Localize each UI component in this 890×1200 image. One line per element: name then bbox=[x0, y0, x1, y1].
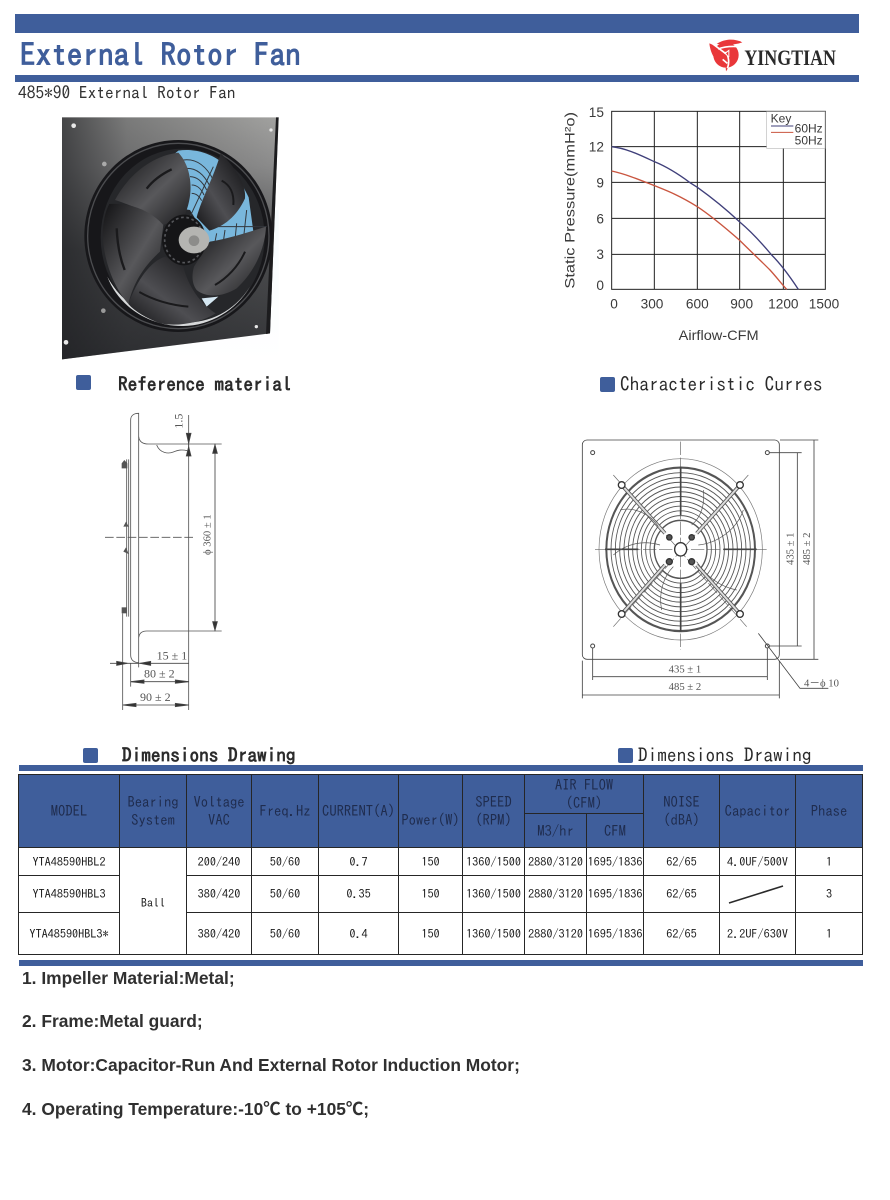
fan-curve chart bbox=[562, 105, 840, 343]
wire guard rings bbox=[606, 468, 755, 631]
front-view dimension drawing: 4－ϕ 10 bbox=[804, 679, 839, 690]
venturi ring bbox=[84, 140, 272, 332]
side-view dimension drawing: 90 ± 2 bbox=[140, 690, 171, 704]
guard struts bbox=[605, 467, 757, 632]
specification table: YTA48590HBL3 bbox=[32, 888, 106, 900]
specification table: VAC bbox=[208, 812, 230, 827]
specification table: 150 bbox=[421, 928, 440, 940]
specification table: 2.2UF/630V bbox=[727, 928, 788, 940]
specification table: MODEL bbox=[51, 803, 87, 818]
heading: dimensions drawing right: Dimensions Drawing bbox=[638, 746, 812, 765]
side-view dimension drawing bbox=[105, 412, 222, 710]
specification table: NOISE bbox=[663, 794, 700, 809]
specification table: Freq.Hz bbox=[259, 803, 311, 818]
specification table: 4.0UF/500V bbox=[727, 856, 788, 868]
specification table: (CFM) bbox=[566, 795, 602, 810]
legend key bbox=[767, 112, 825, 148]
specification table: CURRENT(A) bbox=[322, 803, 395, 818]
specification table: 380/420 bbox=[198, 928, 240, 940]
specification table: 3 bbox=[826, 888, 832, 900]
heading: reference material: Reference material bbox=[118, 375, 292, 394]
specification table: (RPM) bbox=[475, 812, 512, 827]
subtitle: 485*90 External Rotor Fan bbox=[18, 85, 235, 102]
side-view dimension drawing: 15 ± 1 bbox=[157, 648, 187, 662]
table bottom rule bbox=[19, 960, 863, 966]
specification table: Power(W) bbox=[401, 812, 460, 827]
x-axis ticks: 0 bbox=[610, 297, 618, 312]
specification table: 1695/1836 bbox=[588, 856, 642, 868]
heading: characteristic curves: Characteristic Curres bbox=[620, 375, 822, 394]
logo: Yingtian bbox=[709, 40, 836, 72]
motor bolts bbox=[122, 460, 129, 613]
specification table: Bearing bbox=[127, 794, 179, 809]
top banner bar bbox=[15, 14, 859, 33]
specification table: Phase bbox=[811, 803, 847, 818]
specification table: 150 bbox=[421, 888, 440, 900]
specification table: 0.4 bbox=[349, 928, 368, 940]
spec: impeller: 1. Impeller Material:Metal; bbox=[22, 968, 235, 988]
dimension labels: 435 ± 1 bbox=[669, 665, 701, 676]
corner mounting holes bbox=[591, 451, 769, 648]
hub and motor bolts bbox=[618, 482, 743, 617]
specification table: 2880/3120 bbox=[528, 928, 583, 940]
specification table: 62/65 bbox=[666, 888, 697, 900]
specification table: 2880/3120 bbox=[528, 856, 583, 868]
specification table: CFM bbox=[604, 822, 626, 838]
specification table bbox=[18, 774, 863, 955]
specification table: SPEED bbox=[475, 794, 512, 809]
specification table: 1 bbox=[826, 928, 832, 940]
front-view dimension drawing: 485 ± 2 bbox=[802, 532, 813, 565]
dimension lines bbox=[110, 433, 217, 707]
specification table: Voltage bbox=[193, 794, 245, 809]
specification table: Capacitor bbox=[725, 803, 790, 818]
50Hz curve bbox=[612, 171, 787, 289]
dimension lines bbox=[582, 440, 828, 698]
mounting holes bbox=[64, 123, 273, 345]
legend key: 60Hz bbox=[795, 121, 823, 135]
y-axis ticks bbox=[589, 105, 604, 293]
legend key: Key bbox=[771, 112, 791, 126]
specification table: 1360/1500 bbox=[466, 888, 521, 900]
specification table: 50/60 bbox=[270, 928, 300, 940]
front-view dimension drawing: 485 ± 2 bbox=[669, 682, 701, 693]
specification table: 50/60 bbox=[270, 856, 300, 868]
y-axis ticks: 0 bbox=[596, 278, 604, 293]
specification table: 1695/1836 bbox=[588, 928, 642, 940]
sky through guard bbox=[120, 150, 255, 243]
blade outlines bbox=[613, 490, 743, 610]
fan side profile bbox=[105, 413, 222, 710]
specification table: 380/420 bbox=[198, 888, 240, 900]
specification table: 1360/1500 bbox=[466, 928, 521, 940]
specification table: 62/65 bbox=[666, 856, 697, 868]
mounting plate bbox=[62, 117, 279, 359]
specifications list bbox=[22, 968, 520, 1119]
front-view dimension drawing: 435 ± 1 bbox=[786, 532, 797, 565]
mounting plate outline bbox=[582, 440, 779, 659]
bullet: characteristic curves bbox=[600, 377, 615, 392]
specification table: 150 bbox=[421, 856, 440, 868]
specification table: 50/60 bbox=[270, 888, 300, 900]
plot frame and grid bbox=[612, 111, 825, 289]
x-axis ticks: 600 bbox=[686, 297, 709, 312]
dimension labels: 1.5 bbox=[172, 414, 186, 429]
table top rule bbox=[19, 765, 863, 771]
inlet ring bbox=[599, 459, 762, 640]
product illustration: fan bbox=[62, 117, 279, 360]
spec: frame: 2. Frame:Metal guard; bbox=[22, 1011, 203, 1031]
heading: dimensions drawing left: Dimensions Drawing bbox=[122, 746, 296, 765]
y-axis ticks: 12 bbox=[589, 140, 604, 155]
fan blades bbox=[103, 153, 266, 325]
logo wordmark: YINGTIAN bbox=[744, 45, 836, 70]
header rule bbox=[15, 75, 859, 82]
y-axis ticks: 15 bbox=[589, 105, 604, 120]
icon: red three-blade mark bbox=[709, 40, 742, 71]
specification table: 1360/1500 bbox=[466, 856, 521, 868]
side-view dimension drawing: ϕ 360 ± 1 bbox=[203, 514, 214, 555]
title: External Rotor Fan bbox=[20, 39, 301, 70]
y-axis ticks: 9 bbox=[596, 175, 604, 190]
specification table: 1695/1836 bbox=[588, 888, 642, 900]
not-applicable slash in capacitor cell bbox=[728, 885, 784, 904]
light crescent of inner lip bbox=[107, 277, 250, 326]
specification table: 0.35 bbox=[346, 888, 371, 900]
x-axis ticks: 1500 bbox=[809, 297, 840, 312]
specification table: YTA48590HBL3* bbox=[29, 928, 109, 940]
y-axis ticks: 6 bbox=[596, 211, 604, 226]
specification table: Ball bbox=[141, 896, 165, 908]
specification table: 2880/3120 bbox=[528, 888, 583, 900]
60Hz curve bbox=[612, 147, 798, 289]
bullet: reference material bbox=[76, 375, 91, 390]
specification table: 1 bbox=[826, 856, 832, 868]
specification table: 62/65 bbox=[666, 928, 697, 940]
center lines bbox=[595, 442, 767, 650]
specification table: System bbox=[131, 812, 175, 827]
x-axis title: Airflow-CFM bbox=[679, 328, 759, 343]
y-axis title: Static Pressure(mmH²o) bbox=[562, 112, 577, 289]
guard wires bbox=[183, 160, 267, 242]
legend key: 50Hz bbox=[795, 133, 823, 147]
front-view dimension drawing bbox=[582, 440, 839, 698]
x-axis ticks: 300 bbox=[641, 297, 664, 312]
motor hub bbox=[162, 215, 209, 265]
y-axis ticks: 3 bbox=[596, 247, 604, 262]
specification table: M3/hr bbox=[537, 822, 574, 838]
x-axis ticks: 900 bbox=[730, 297, 753, 312]
specification table: 200/240 bbox=[198, 856, 240, 868]
spec: temperature: 4. Operating Temperature:-10℃ to +105℃; bbox=[22, 1099, 369, 1119]
specification table: AIR FLOW bbox=[555, 777, 613, 792]
spec: motor: 3. Motor:Capacitor-Run And External Rotor Induction Motor; bbox=[22, 1055, 520, 1075]
x-axis ticks: 1200 bbox=[768, 297, 799, 312]
photo backdrop bbox=[62, 210, 279, 360]
bullet: dimensions drawing left bbox=[83, 748, 98, 763]
bullet: dimensions drawing right bbox=[618, 748, 633, 763]
specification table: 0.7 bbox=[349, 856, 368, 868]
side-view dimension drawing: 80 ± 2 bbox=[144, 667, 175, 681]
specification table: (dBA) bbox=[663, 812, 700, 827]
x-axis ticks bbox=[610, 297, 840, 312]
specification table: YTA48590HBL2 bbox=[32, 856, 106, 868]
